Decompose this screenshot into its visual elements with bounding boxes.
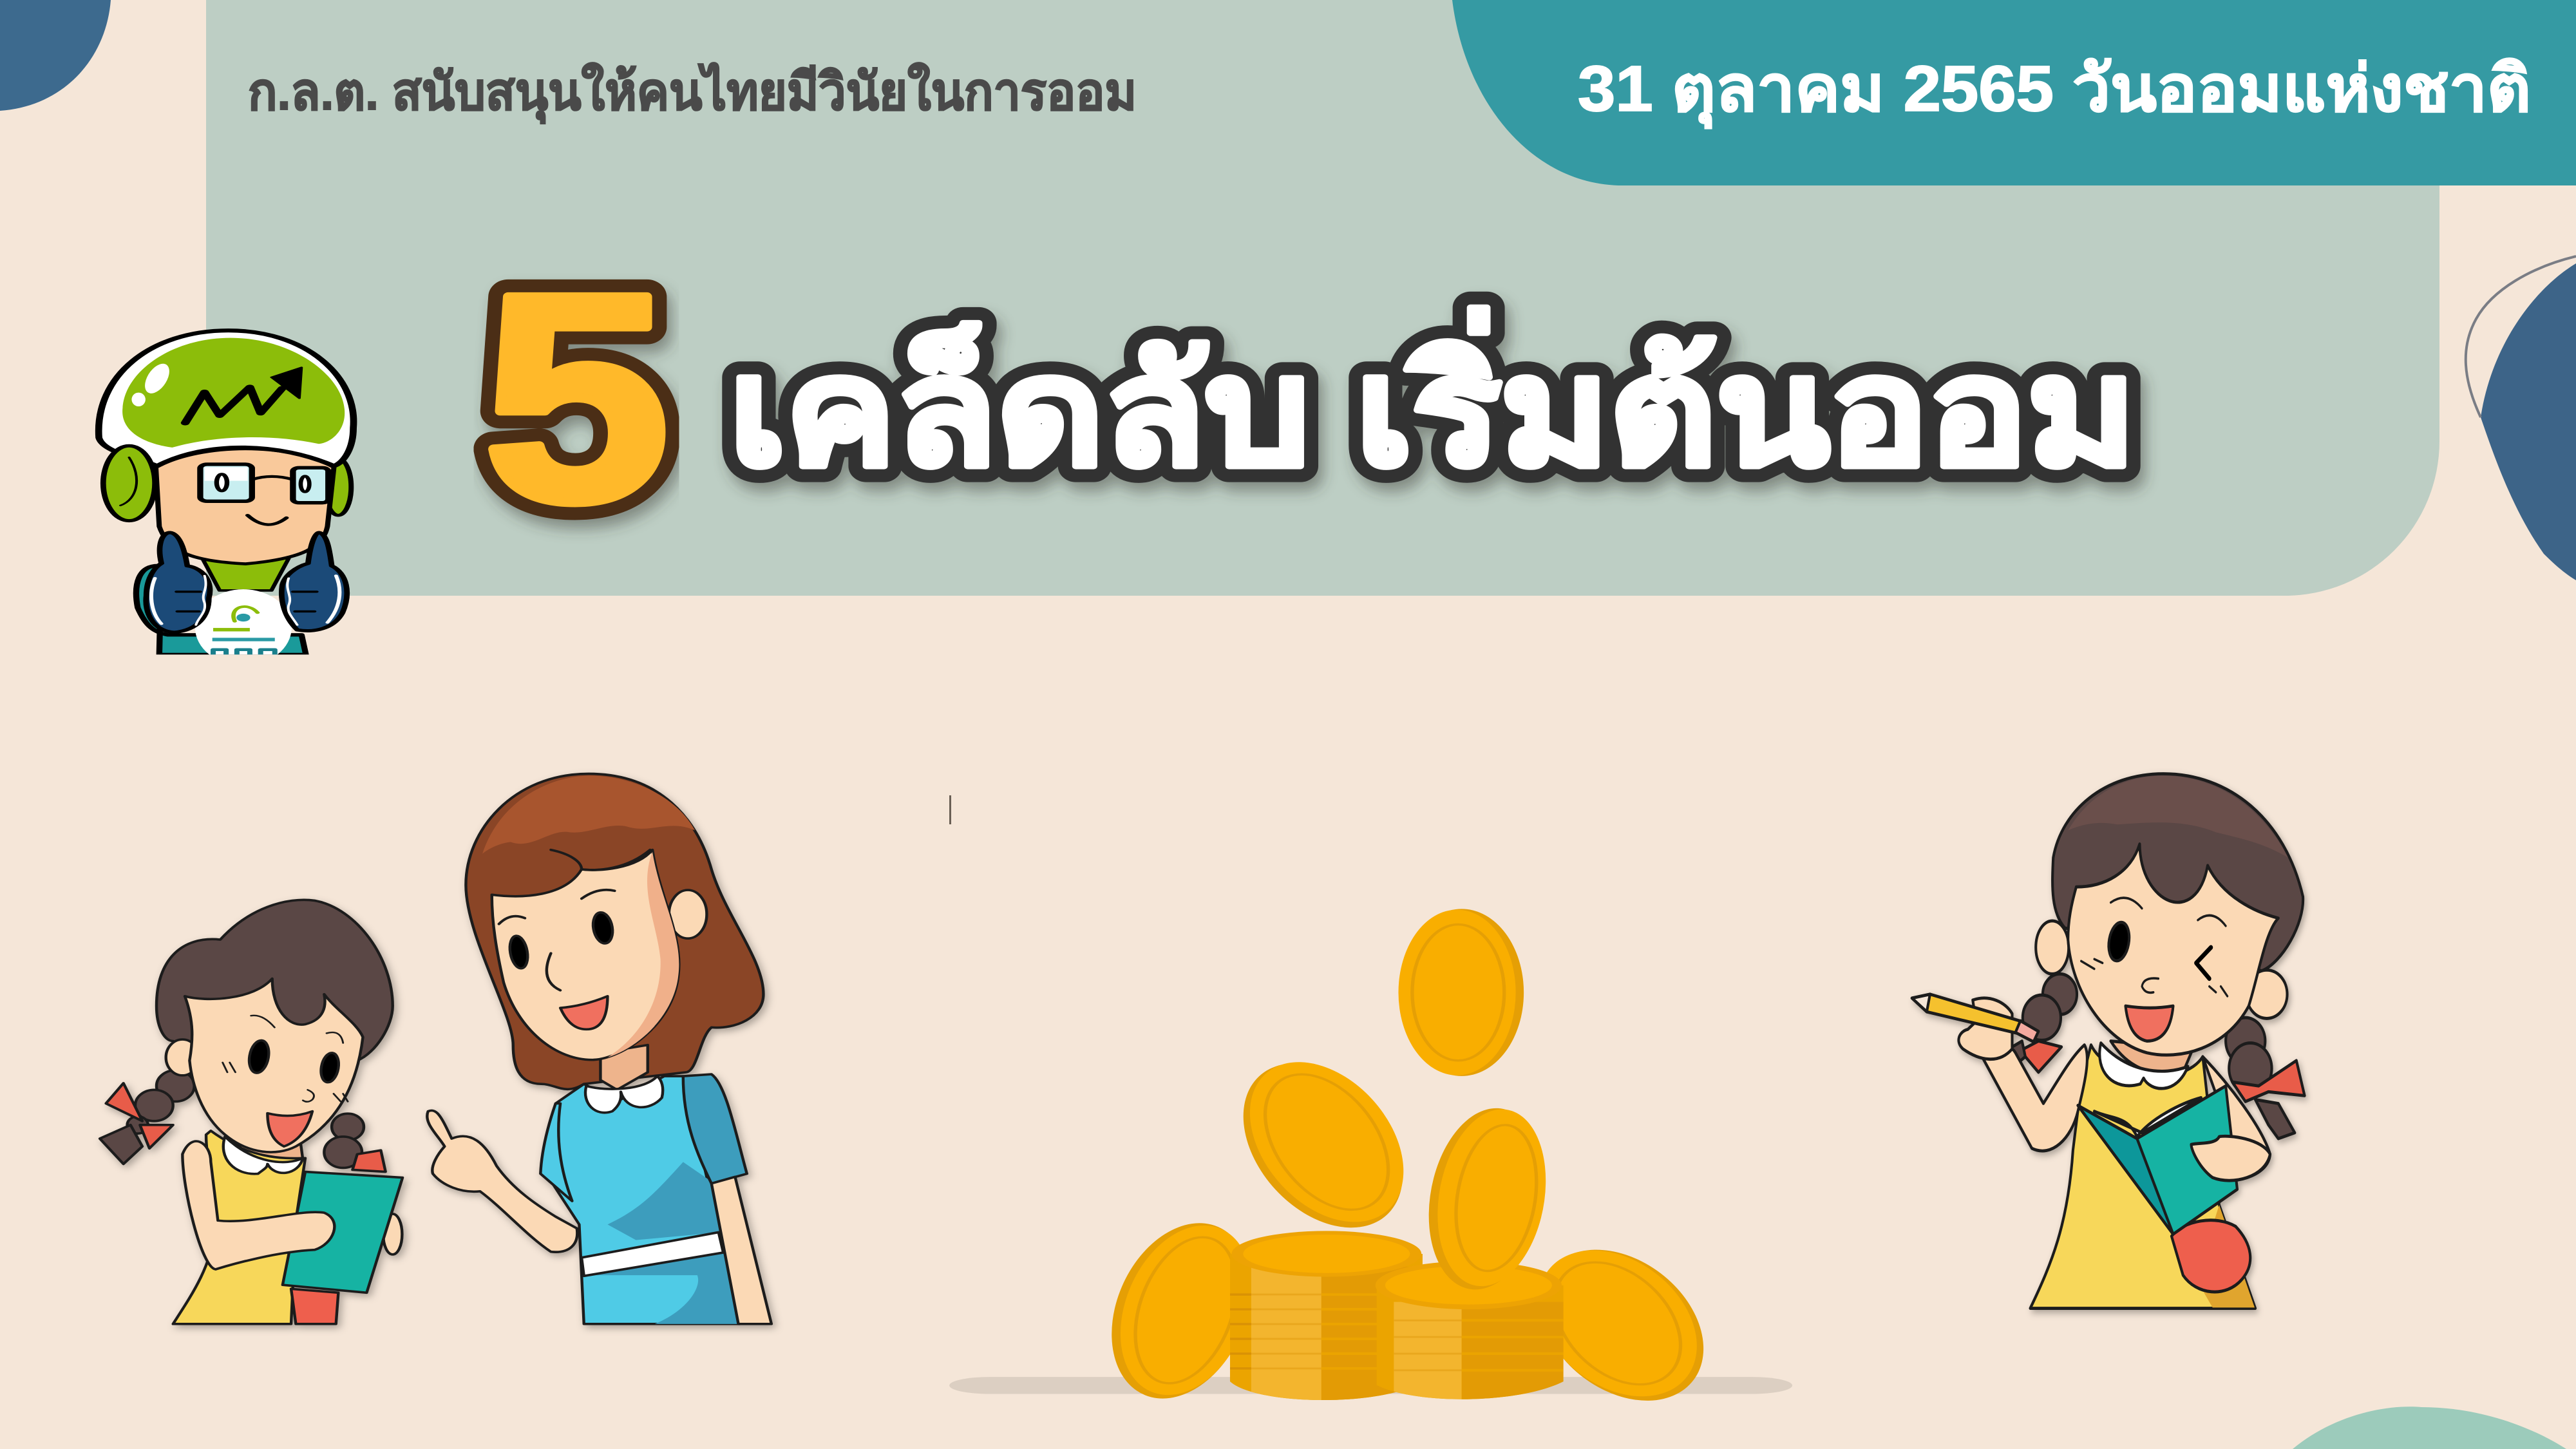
right braid: [2226, 1018, 2295, 1139]
girl book: [283, 1172, 402, 1293]
right coin stack: [1376, 1261, 1566, 1407]
hair highlight: [2068, 776, 2288, 858]
girl mouth: [267, 1112, 312, 1146]
mother collar: [585, 1076, 663, 1113]
face: [2068, 844, 2278, 1055]
girl left braid: [100, 1070, 194, 1164]
hair: [2052, 774, 2303, 971]
dress shading: [2196, 1205, 2255, 1307]
girl eyes: [247, 1039, 341, 1083]
mascot: [99, 330, 354, 666]
left ear muff: [103, 446, 155, 521]
mouth: [2126, 1006, 2173, 1041]
mother pointing arm: [427, 1110, 577, 1252]
face: [156, 449, 334, 564]
mother fringe: [551, 850, 650, 870]
mother dress: [546, 1076, 740, 1324]
right thumb up: [281, 533, 347, 630]
girl collar: [223, 1137, 303, 1174]
title text: เคล็ดลับ เริ่มต้นออม: [729, 307, 2136, 496]
brows and nose: [2081, 898, 2228, 996]
girl bag: [291, 1289, 338, 1324]
helmet dome: [122, 338, 345, 448]
mother sleeve right: [683, 1074, 747, 1184]
mother mouth: [560, 996, 607, 1029]
title number 5: 5: [483, 233, 670, 563]
girl figure: [100, 900, 402, 1324]
girl ear: [166, 1039, 199, 1075]
open book: [2078, 1086, 2237, 1234]
title text: เคล็ดลับ เริ่มต้นออม: [729, 307, 2136, 496]
girl face: [185, 979, 363, 1152]
dress: [2031, 1045, 2255, 1309]
girl right braid: [324, 1113, 364, 1168]
illustration: girl with pencil and book: [1912, 774, 2305, 1309]
mother sleeve left: [540, 1103, 572, 1201]
top falling coin: [1398, 909, 1524, 1076]
helmet highlights: [131, 362, 174, 406]
book hand: [2192, 1136, 2270, 1180]
glasses: [200, 464, 328, 503]
mother arm right: [712, 1177, 772, 1324]
pencil arm: [1981, 1045, 2087, 1151]
girl left bow: [106, 1083, 173, 1148]
girl features: [223, 1016, 348, 1102]
helmet chart arrow: [185, 368, 301, 423]
helmet: [99, 330, 354, 466]
mother belt: [582, 1232, 723, 1276]
blob: right: [2481, 263, 2576, 580]
mother brows and nose: [499, 890, 614, 990]
mother eyes: [507, 911, 615, 969]
collar: [2099, 1043, 2188, 1088]
girl neck: [227, 1135, 303, 1160]
mother face: [492, 850, 679, 1060]
left braid: [2009, 974, 2077, 1066]
illustration: gold coins: [949, 909, 1792, 1416]
neck: [2111, 1041, 2193, 1074]
subtitle: ก.ล.ต. สนับสนุนให้คนไทยมีวินัยในการออม: [248, 62, 1137, 124]
mother neck: [600, 1045, 648, 1090]
girl far hand: [383, 1214, 402, 1255]
standing coin: [1418, 1105, 1557, 1293]
girl right bow: [352, 1150, 386, 1172]
date banner: [1452, 0, 2576, 185]
mother dress shading: [582, 1162, 740, 1324]
small tick mark: [949, 795, 951, 824]
right coin: [1510, 1235, 1734, 1416]
mother face shadow: [607, 852, 679, 1057]
ears: [2036, 921, 2287, 1018]
mother hair: [466, 774, 763, 1089]
blob: top left: [0, 0, 111, 111]
girl hair: [156, 900, 393, 1061]
right arm behind: [2196, 1057, 2270, 1180]
left thumb up: [146, 533, 210, 632]
middle falling coin: [1214, 1050, 1434, 1240]
blob outline: right: [2466, 256, 2576, 417]
blob: bottom right: [2293, 1406, 2566, 1449]
mother figure: [427, 774, 772, 1324]
eye: [2106, 920, 2132, 963]
background panel: [206, 0, 2439, 596]
girl arm: [182, 1141, 334, 1269]
mascot body: [137, 565, 306, 654]
left coin: [1092, 1216, 1271, 1406]
mother hair highlight: [482, 776, 695, 854]
mascot logo badge: [195, 589, 292, 654]
pencil: [1912, 994, 2038, 1042]
mother ear: [669, 890, 706, 938]
winking eye: [2196, 947, 2211, 979]
bag: [2172, 1220, 2250, 1292]
girl dress: [173, 1131, 305, 1324]
left coin stack: [1230, 1231, 1425, 1409]
right ear muff: [331, 460, 354, 516]
illustration: girl and mother: [100, 774, 772, 1324]
smile: [248, 515, 287, 525]
right bow: [2232, 1061, 2305, 1101]
title number 5: 5: [483, 233, 670, 563]
banner text: 31 ตุลาคม 2565 วันออมแห่งชาติ: [1578, 53, 2531, 129]
left bow: [2005, 1041, 2061, 1072]
pencil hand: [1958, 998, 2012, 1059]
ground shadow: [949, 1377, 1792, 1394]
mascot chest: [202, 558, 289, 591]
